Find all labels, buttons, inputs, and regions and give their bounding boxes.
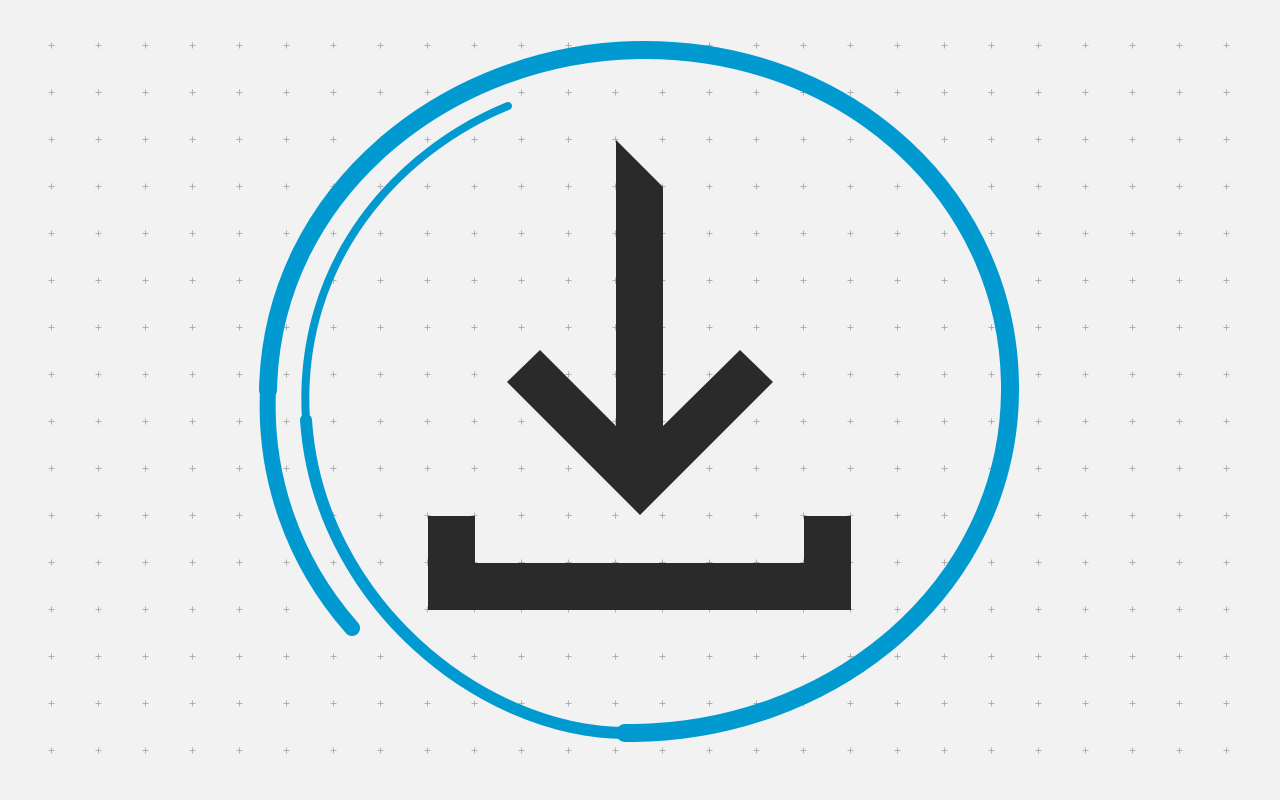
icon: blue hand-drawn circle [268, 50, 1010, 733]
icon: tray [428, 516, 851, 610]
icon: download arrow [428, 140, 851, 610]
